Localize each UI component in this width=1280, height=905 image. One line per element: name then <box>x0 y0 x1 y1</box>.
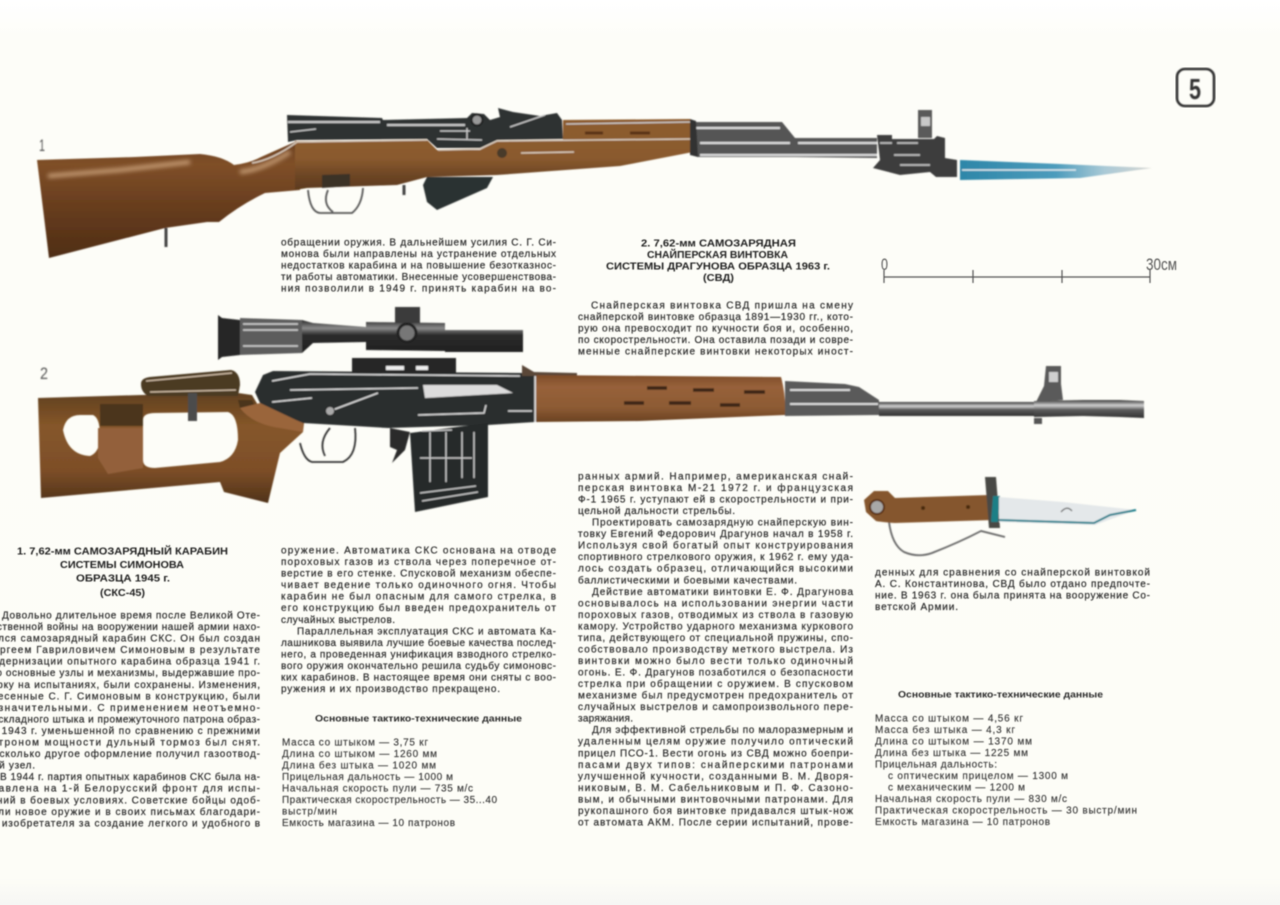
SKS stock top line <box>252 139 690 163</box>
SVD cheek rest highlight <box>146 373 236 392</box>
rifle 1: SKS carbine with bayonet <box>37 108 1152 258</box>
SVD charging handle <box>326 406 334 416</box>
SKS data list: Масса со штыком — 3,75 кг <box>282 738 428 748</box>
text: SVD intro: Снайперская винтовка СВД пришла на смену <box>591 300 853 312</box>
text: SVD column 3: от автомата АКМ. После серии испытаний, прове- <box>578 818 853 828</box>
SVD data list: Емкость магазина — 10 патронов <box>875 817 1050 828</box>
SKS bayonet fuller <box>962 169 1076 171</box>
SVD scope dial <box>398 324 416 342</box>
SKS data list: выстр/мин <box>282 806 337 818</box>
text: SVD column 3: случайных выстрелов и самопроизвольного пере- <box>578 702 853 713</box>
text: SVD column 3: улучшенной кучности, созданными В. М. Дворя- <box>578 771 853 782</box>
text: SVD column 4: ние. В 1963 г. она была принята на вооружение Со- <box>875 590 1150 602</box>
text: SKS column 2 lower <box>281 546 556 695</box>
text: SKS column 1 <box>0 610 260 829</box>
text: SKS column 2 lower: пороховых газов из ствола через поперечное от- <box>281 557 556 568</box>
text: SKS column 2 lower: ких карабинов. В настоящее время они сняты с воо- <box>281 672 556 684</box>
text: SVD column 3: Действие автоматики винтовки Е. Ф. Драгунова <box>592 587 853 598</box>
text: SVD column 4: ветской Армии. <box>875 602 958 613</box>
figure number 2: 2 <box>40 364 48 383</box>
bayonet guard <box>985 477 1000 528</box>
SVD scope tube <box>302 320 523 353</box>
text: SVD column 3: Ф-1 1965 г. уступают ей в скорострельности и при- <box>578 495 853 506</box>
SVD front sight <box>1036 366 1063 402</box>
text: SVD intro: рую она превосходит по кучности боя и, особенно, <box>578 323 853 335</box>
SKS data list: Прицельная дальность — 1000 м <box>282 772 453 783</box>
SKS gas ring <box>472 114 482 126</box>
SVD magazine <box>410 423 488 512</box>
text: SVD intro: снайперской винтовке образца 1891—1930 гг., кото- <box>578 311 853 323</box>
SKS front sight <box>918 110 932 138</box>
SVD stock dark band <box>100 400 262 426</box>
SVD magazine latch <box>390 428 410 463</box>
text: SVD column 3: рукопашного боя винтовке придавался штык-нож <box>578 805 853 817</box>
SKS data heading: Основные тактико-технические данные <box>315 714 522 724</box>
bayonet wire cutter <box>889 522 1005 555</box>
text: SVD intro: менные снайперские винтовки некоторых иност- <box>578 347 853 358</box>
SVD scope ribs <box>243 324 298 346</box>
text: SVD intro <box>578 300 853 358</box>
SVD data list: Длина без штыка — 1225 мм <box>875 747 1028 759</box>
text: SVD column 3: пороховых газов, отводимых из ствола в газовую <box>578 610 854 621</box>
SKS pins <box>166 185 404 247</box>
SVD data list <box>875 714 1137 828</box>
SKS data list: Практическая скорострельность — 35...40 <box>282 795 497 806</box>
heading: SKS: (СКС-45) <box>100 588 145 599</box>
SVD flash hider <box>1034 400 1144 418</box>
text: SVD column 3: винтовки можно было вести только одиночный <box>578 655 853 667</box>
text: SKS column 2 lower: случайных выстрелов. <box>281 615 395 626</box>
SKS data list <box>282 738 497 829</box>
SVD receiver <box>255 371 535 428</box>
SVD handguard slots <box>624 388 765 405</box>
bayonet knife <box>864 477 1136 555</box>
text: SVD column 3: Используя свой богатый опыт конструирования <box>578 540 853 552</box>
rifle 2: SVD sniper rifle <box>38 307 1144 512</box>
heading: SVD: СИСТЕМЫ ДРАГУНОВА ОБРАЗЦА 1963 г. <box>606 262 830 272</box>
page number badge <box>1177 69 1214 106</box>
SVD cheek rest <box>141 370 240 396</box>
bayonet handle <box>864 491 993 523</box>
text: SKS column 2 lower: чивает ведение только одиночного огня. Чтобы <box>281 579 556 591</box>
text: SVD column 3: собствовало производству меткого выстрела. Из <box>578 644 853 656</box>
bayonet pommel <box>870 500 884 514</box>
SKS receiver stripes <box>288 122 465 125</box>
SVD sight base <box>1034 418 1042 424</box>
SVD gas block <box>785 381 879 416</box>
bayonet rivets <box>923 507 968 508</box>
text: SVD column 4: денных для сравнения со снайперской винтовкой <box>875 568 1150 578</box>
SVD front sight highlight <box>1049 372 1058 382</box>
SKS data list: Начальная скорость пули — 735 м/с <box>282 784 473 794</box>
SKS muzzle assembly <box>873 135 957 177</box>
text: SKS column 2 lower: карабин не был опасным для самого стрелка, в <box>281 591 556 603</box>
bayonet collar <box>991 496 1000 522</box>
SKS data list: Длина без штыка — 1020 мм <box>282 760 436 772</box>
SVD data list: с оптическим прицелом — 1300 м <box>888 771 1068 782</box>
bayonet edge <box>999 510 1136 523</box>
text: SKS column 1: Довольно длительное время после Великой Оте- <box>2 610 260 622</box>
SVD data list: Практическая скорострельность — 30 выстр/мин <box>875 806 1137 816</box>
SKS trigger housing <box>322 174 350 188</box>
SVD receiver details <box>272 374 535 422</box>
SVD trigger guard <box>300 428 356 462</box>
heading: SVD: (СВД) <box>703 273 734 284</box>
SKS butt stock <box>37 141 300 258</box>
SKS gas tube and barrel <box>695 122 877 158</box>
SVD cheek rest clamp <box>188 393 197 421</box>
scale ticks <box>884 270 1150 283</box>
text: SVD column 3: вым, и обычными винтовочными патронами. Для <box>578 793 853 805</box>
SVD data list: Масса со штыком — 4,56 кг <box>875 714 1023 724</box>
SVD magazine ribs <box>420 430 478 501</box>
SKS data list: Длина со штыком — 1260 мм <box>282 749 437 760</box>
text: SVD intro: по скорострельности. Она оставила позади и совре- <box>578 335 853 346</box>
text: SVD column 3: Проектировать самозарядную снайперскую вин- <box>592 518 853 529</box>
text: SVD column 3: перская винтовка М-21 1972 г. и французская <box>578 482 853 494</box>
SVD data list: с механическим — 1200 м <box>888 782 1025 794</box>
SVD rear sight base <box>522 365 577 376</box>
text: SVD column 4 <box>875 568 1150 613</box>
text: SKS column 2 upper: монова были направлены на устранение отдельных <box>281 248 556 260</box>
text: SVD column 3: лось создать образец, отличающийся высокими <box>578 563 853 575</box>
SKS bayonet blade <box>960 160 1152 180</box>
SKS data list: Емкость магазина — 10 патронов <box>282 818 455 829</box>
SVD data list: Начальная скорость пули — 830 м/с <box>875 794 1067 805</box>
text: SVD column 3: ранных армий. Например, американская снай- <box>578 472 853 482</box>
text: SVD column 3: баллистическими и боевыми качествами. <box>578 574 797 586</box>
text: SVD column 4: А. С. Константинова, СВД было отдано предпочте- <box>875 578 1150 590</box>
SVD data list: Масса без штыка — 4,3 кг <box>875 724 1015 736</box>
text: SVD column 3: прицел ПСО-1. Вести огонь из СВД можно боепри- <box>578 747 853 759</box>
text: SKS column 2 upper: недостатков карабина и на повышение безотказнос- <box>281 260 556 272</box>
text: SVD column 3: огонь. Е. Ф. Драгунов позаботился о безопасности <box>578 666 853 678</box>
SKS muzzle highlight <box>880 143 930 165</box>
text: SVD column 3: камору. Устройство ударного механизма куркового <box>578 621 853 632</box>
text: SVD column 3: пасами двух типов: снайперскими патронами <box>578 760 853 771</box>
text: SKS column 2 lower: оружение. Автоматика СКС основана на отводе <box>281 546 556 556</box>
heading: SKS: 1. 7,62-мм САМОЗАРЯДНЫЙ КАРАБИН <box>17 544 228 558</box>
SKS trigger guard <box>308 188 363 213</box>
text: SVD column 3 <box>578 472 854 828</box>
text: SVD column 3: товку Евгений Федорович Драгунов начал в 1958 г. <box>578 529 853 540</box>
SKS wood end band <box>690 119 698 157</box>
scale 30 cm label: 30см <box>1146 255 1177 274</box>
heading: SKS <box>17 544 228 599</box>
SVD data list: Длина со штыком — 1370 мм <box>875 736 1032 748</box>
SKS stock screw <box>497 148 507 158</box>
text: SVD column 3: заряжания. <box>578 714 633 725</box>
text: SVD column 3: стрелка при обращении с оружием. В спусковом <box>578 678 853 690</box>
text: SVD column 3: основывалось на использовании энергии части <box>578 598 853 609</box>
SKS receiver details <box>290 115 690 140</box>
text: SVD column 3: типа, действующего от специальной пружины, спо- <box>578 633 853 644</box>
heading: SVD <box>606 238 830 284</box>
SKS magazine <box>423 177 493 210</box>
text: SVD column 3: цельной дальности стрельбы. <box>578 505 735 517</box>
scale bar <box>881 255 1177 283</box>
text: SKS column 2 lower: Параллельная эксплуатация СКС и автомата Ка- <box>297 626 556 637</box>
SVD data heading: Основные тактико-технические данные <box>898 690 1103 700</box>
text: SVD column 3: Для эффективной стрельбы по малоразмерным и <box>592 724 853 736</box>
SVD scope turret <box>395 307 420 323</box>
SKS stock highlights <box>48 152 290 176</box>
SVD scope eyepiece <box>218 315 240 360</box>
SVD gas block highlight <box>790 390 878 404</box>
text: SKS column 2 upper: обращении оружия. В дальнейшем усилия С. Г. Си- <box>281 236 556 248</box>
SKS fore stock <box>295 119 694 190</box>
scale zero label: 0 <box>881 255 888 274</box>
bayonet blade <box>999 497 1136 525</box>
SVD barrel <box>879 402 1034 416</box>
SVD mount gaps <box>386 366 428 370</box>
SVD stock shading <box>98 428 143 474</box>
heading: SKS: СИСТЕМЫ СИМОНОВА <box>60 560 184 571</box>
heading: SVD: СНАЙПЕРСКАЯ ВИНТОВКА <box>647 248 788 261</box>
heading: SVD: 2. 7,62-мм САМОЗАРЯДНАЯ <box>641 238 796 250</box>
text: SVD column 3: механизме был предусмотрен предохранитель от <box>578 690 853 702</box>
bayonet slot <box>1061 508 1072 512</box>
text: SKS column 2 upper: ти работы автоматики. Внесенные усовершенствова- <box>281 271 556 283</box>
SVD scope ribbed body <box>240 318 302 355</box>
SVD handguard <box>536 375 785 422</box>
SVD pistol grip top <box>240 403 303 432</box>
heading: SKS: ОБРАЗЦА 1945 г. <box>76 574 170 584</box>
SVD bolt carrier <box>423 385 513 398</box>
text: SKS column 2 upper <box>281 236 556 294</box>
text: SKS column 2 lower: ружения и их производство прекращено. <box>281 684 500 695</box>
text: SVD column 3: спортивного стрелкового оружия, к 1962 г. ему уда- <box>578 552 853 563</box>
text: SKS column 2 lower: лашникова выявила лучшие боевые качества послед- <box>281 637 556 649</box>
page number badge: 5 <box>1189 74 1201 106</box>
SVD scope mount <box>352 358 456 373</box>
text: SKS column 2 lower: него, а проведенная унификация взводного стрелко- <box>281 648 556 660</box>
SVD data list: Прицельная дальность: <box>875 760 997 770</box>
text: SKS column 2 lower: верстие в его стенке. Спусковой механизм обеспе- <box>281 568 556 580</box>
text: SKS column 1: В 1944 г. партия опытных карабинов СКС была на- <box>0 771 260 783</box>
SKS handguard vents <box>585 132 650 134</box>
SVD thumbhole stock <box>38 393 304 503</box>
text: SVD column 3: никовым, В. М. Сабельниковым и П. Ф. Сазоно- <box>578 782 853 794</box>
text: SVD column 3: удаленным целям оружие получило оптический <box>578 737 853 748</box>
text: SKS column 2 upper: ния позволили в 1949 г. принять карабин на во- <box>281 282 556 294</box>
SKS tube highlights <box>696 128 877 155</box>
SKS front sight highlight <box>921 117 930 126</box>
figure number 1: 1 <box>39 136 45 155</box>
text: SKS column 2 lower: вого оружия окончательно решила судьбу симоновс- <box>281 660 556 672</box>
text: SKS column 2 lower: его конструкцию был введен предохранитель от <box>281 602 556 614</box>
SKS receiver <box>287 108 563 148</box>
